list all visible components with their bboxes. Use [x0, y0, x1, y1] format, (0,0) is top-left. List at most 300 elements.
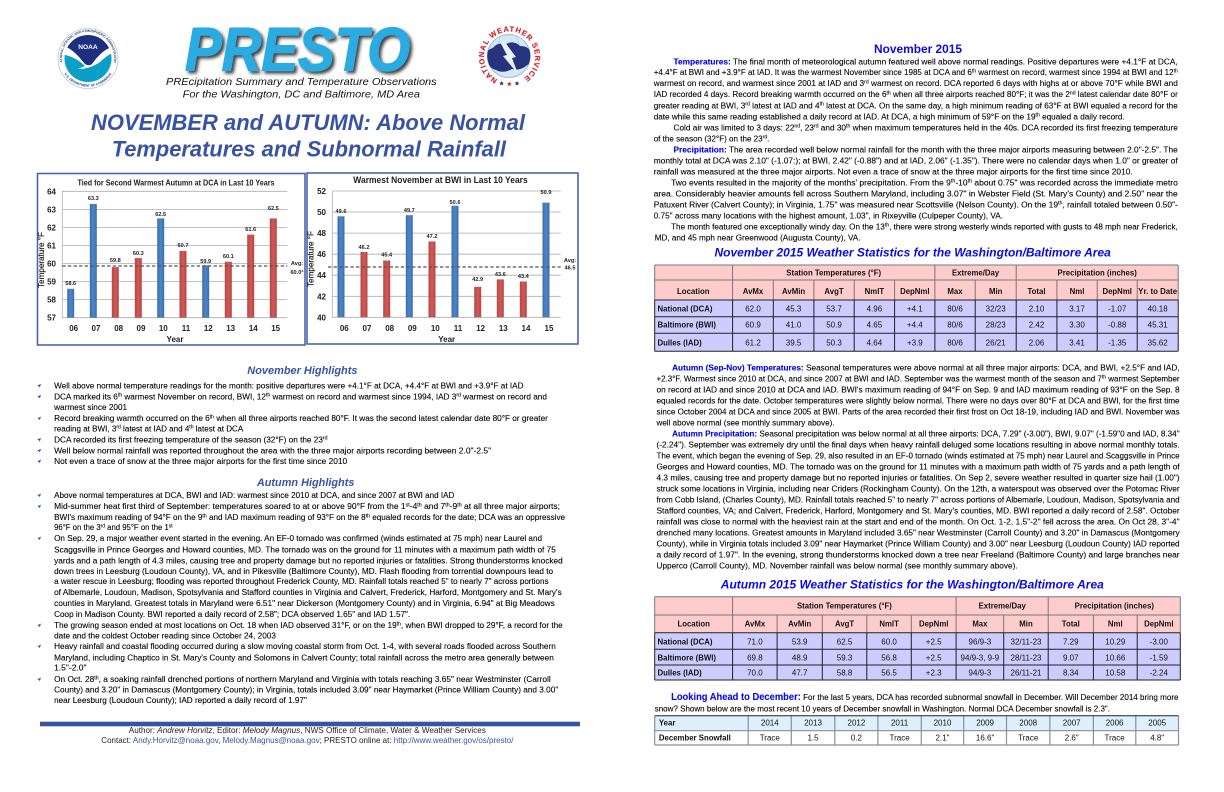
footer: credits: Author: Andrew Horvitz, Editor: Melody Magnus, NWS Office of Climate, Water & Weather Services	[129, 725, 486, 735]
table: November 2015 weather statistics: 2.42	[1029, 321, 1045, 330]
table: November 2015 weather statistics: 3.41	[1069, 338, 1085, 347]
text block: November 2015 narrative: th	[951, 179, 955, 185]
table: Autumn 2015 weather statistics: +2.5	[926, 638, 942, 647]
table: Autumn 2015 weather statistics: 56.8	[881, 653, 897, 662]
table: Autumn 2015 weather statistics: 58.8	[837, 669, 853, 678]
table: November 2015 weather statistics: DepNml	[900, 287, 930, 296]
table: Autumn 2015 weather statistics: 9.07	[1063, 653, 1079, 662]
table: Autumn 2015 weather statistics: Dulles (IAD)	[658, 669, 702, 678]
bar chart: DCA autumn temperature: 63	[47, 205, 57, 214]
table: November 2015 weather statistics: 62.0	[745, 305, 761, 314]
text block: Autumn highlights list: near Leesburg (Loudoun County); IAD reported a daily record of 1.97"	[54, 695, 307, 705]
text block: November 2015 narrative: warmest on record, and warmest since 2001 at IAD and 3	[654, 78, 873, 88]
bar chart: BWI November temperature: 43.6	[495, 272, 506, 278]
bar chart: BWI November temperature: 12	[476, 324, 486, 333]
bar chart: BWI November temperature: 46.2	[359, 245, 369, 251]
text block: Autumn highlights list: and 95°F on the 1	[105, 522, 169, 532]
text block: November 2015 narrative: warmest on record. DCA reported 6 days with highs at or above 70°F while BWI and	[869, 78, 1178, 88]
text block: Autumn highlights list: and 7	[422, 501, 445, 511]
text block: Autumn narrative: well above normal (see monthly summary above).	[656, 417, 834, 427]
table: Autumn 2015 weather statistics: 94/9-3	[969, 669, 992, 678]
bar chart: DCA autumn temperature: 62.5	[268, 206, 279, 212]
heading: November 2015: November 2015	[874, 42, 962, 56]
table: December snowfall history: 2006	[1106, 719, 1124, 728]
table: December snowfall history: 0.2	[851, 733, 863, 742]
table: December snowfall history: Year	[659, 719, 675, 728]
text block: November 2015 narrative: IAD recorded 4 days. Record breaking warmth occurred on the 6	[654, 89, 900, 99]
table: Autumn 2015 weather statistics: 53.9	[792, 638, 808, 647]
text block: November 2015 narrative: .	[767, 133, 769, 143]
text block: November 2015 narrative: The month featured one exceptionally windy day. On the 13	[671, 221, 897, 231]
bar chart: DCA autumn temperature: Temperature °F	[36, 232, 46, 288]
bar chart: DCA autumn temperature: Year	[167, 335, 183, 344]
text block: Autumn narrative: from Cobb Island, (Charles County), MD. Rainfall totals reached 5" to nearly 7" across portions of Albemarle, Loudoun, Madison, Spotsylvania and	[656, 494, 1180, 504]
bar chart: DCA autumn temperature: 62.5	[155, 212, 166, 218]
bar chart: BWI November temperature: 47.2	[427, 234, 437, 240]
table: November 2015 weather statistics: 2.10	[1029, 305, 1045, 314]
bar chart: BWI November temperature: 40	[317, 313, 327, 322]
table: Autumn 2015 weather statistics: DepNml	[1144, 620, 1174, 629]
table: November 2015 weather statistics: Dulles (IAD)	[658, 338, 702, 347]
text block: Autumn highlights list: of Albemarle, Loudoun, Madison, Spotsylvania and Stafford counties in Virginia and Calvert, Frederick, Harford, Montgomery and St. Mary's	[54, 587, 562, 597]
bar chart: DCA autumn temperature: 11	[182, 324, 191, 333]
text block: November 2015 narrative: latest calendar date 80°F or	[1076, 89, 1178, 99]
bar chart: DCA autumn temperature: 62	[47, 224, 57, 232]
text block: Autumn highlights list: -4	[410, 501, 417, 511]
table: November 2015 weather statistics: Station Temperatures (°F)	[786, 268, 882, 277]
bar chart: BWI November temperature: 15	[545, 324, 554, 333]
text block: Autumn highlights list: counties in Maryland. Greatest totals in Maryland were 6.51" near Dickerson (Montgomery County) and in Virginia, 6.94" at Big Meadows	[54, 598, 555, 608]
table: November 2015 weather statistics: 80/6	[947, 305, 963, 314]
text block: November highlights list: warmest on record and	[461, 391, 547, 401]
text block: November highlights list: rd	[456, 393, 461, 399]
bar chart: BWI November temperature: 50	[317, 208, 327, 217]
subtitle: For the Washington, DC and Baltimore, MD Area	[183, 89, 420, 101]
text block: November 2015 narrative: date while this same reading established a daily record at IAD. At DCA, a high minimum of 59°F on the 19	[654, 111, 1056, 121]
table: November 2015 weather statistics: 80/6	[947, 338, 963, 347]
bar chart: DCA autumn temperature: 61	[47, 242, 57, 250]
text block: Autumn highlights list: th	[397, 621, 401, 627]
table: November 2015 weather statistics: 41.0	[786, 321, 802, 330]
bar chart: BWI November temperature: 49.7	[404, 208, 415, 214]
bar chart: BWI November temperature: 45.4	[381, 252, 393, 258]
table: November 2015 weather statistics: 3.17	[1069, 305, 1085, 314]
text block: Autumn narrative: struck some locations in Virginia, including near Criders (Rockingham County). On the 12th, a waterspout was observed over the Potomac River	[656, 483, 1180, 493]
bar chart: DCA autumn temperature: 64	[47, 187, 57, 196]
table: December snowfall history: 16.6"	[976, 733, 994, 742]
text block: Autumn narrative: Autumn (Sep-Nov) Temperatures: Seasonal temperatures were above normal at all three major airports: DCA, and BWI, +2.5°F and IAD,	[672, 362, 1180, 372]
table: December snowfall history: 2012	[848, 719, 866, 728]
table: Autumn 2015 weather statistics: 59.3	[837, 653, 853, 662]
text block: November 2015 narrative: equaled a daily record.	[1040, 111, 1125, 121]
table: Autumn 2015 weather statistics: 10.29	[1105, 638, 1126, 647]
text block: Autumn narrative: Georges and Howard counties, MD. The tornado was on the ground for 11 minutes with a maximum path width of 75 yards and a path length of	[656, 461, 1180, 471]
text block: Autumn highlights list: th	[366, 513, 370, 519]
table: December snowfall history: Trace	[1105, 733, 1125, 742]
table: November 2015 weather statistics: 32/23	[986, 305, 1006, 314]
text block: November 2015 narrative: when all three airports reached 80°F; it was the 2	[891, 89, 1070, 99]
table: December snowfall history: 2.6"	[1065, 733, 1079, 742]
icon: NOAA logo: U.S. DEPARTMENT OF COMMERCE	[64, 72, 112, 87]
table: December snowfall history: Trace	[1018, 733, 1039, 742]
table: November 2015 weather statistics: -0.88	[1108, 321, 1127, 330]
text block: November 2015 narrative: +4.4°F at BWI and +3.9°F at IAD. It was the warmest November since 1985 at DCA and 6	[654, 67, 994, 77]
text block: Autumn narrative: +2.3°F. Warmest since 2010 at DCA, and since 2007 at BWI and IAD. September was the warmest month of the season and 7	[656, 373, 1137, 383]
text block: November 2015 narrative: rd	[745, 102, 750, 108]
text block: November 2015 narrative: monthly total at DCA was 2.10" (-1.07:); at BWI, 2.42" (-0.88") and at IAD, 2.06" (-1.35"). There were no calendar days when 1.0" or greater of	[654, 155, 1178, 165]
text block: Autumn highlights list: Maryland, including Chaptico in St. Mary's County and Solomons in Calvert County; total rainfall across the metro area generally between	[54, 652, 554, 662]
bar chart: BWI November temperature: Warmest November at BWI in Last 10 Years	[353, 175, 528, 185]
bar chart: DCA autumn temperature: 60.7	[178, 243, 188, 249]
table: November 2015 weather statistics: 45.3	[786, 305, 802, 314]
text block: November 2015 narrative: Temperatures: The final month of meteorological autumn featured well above normal readings. Positive departures were +4.1°F at DCA,	[674, 56, 1178, 66]
text block: November highlights list: th	[266, 393, 270, 399]
text block: Autumn highlights list: th	[445, 502, 450, 508]
table: November 2015 weather statistics: Baltimore (BWI)	[658, 321, 716, 330]
table: November 2015 weather statistics: 50.9	[826, 321, 842, 330]
bar chart: DCA autumn temperature: 58.6	[65, 281, 76, 287]
bar chart: BWI November temperature: 42	[317, 292, 327, 301]
text block: Autumn highlights list: th	[94, 675, 99, 681]
table: Autumn 2015 weather statistics	[655, 597, 1180, 680]
table: November 2015 weather statistics: +4.1	[907, 305, 923, 314]
text block: November highlights list: latest at IAD and 4	[121, 423, 190, 433]
bar chart: DCA autumn temperature: 13	[226, 324, 236, 333]
text block: Autumn highlights list: Heavy rainfall and coastal flooding occurred during a slow moving coastal storm from Oct. 1-4, with several roads flooded across Southern	[54, 641, 556, 651]
bar chart: DCA autumn temperature: 60.1	[223, 254, 234, 260]
bar chart: DCA autumn temperature: 14	[249, 324, 258, 333]
bar chart: BWI November temperature: 09	[408, 324, 417, 333]
bar chart: BWI November temperature: 44	[317, 271, 327, 280]
table: November 2015 weather statistics: Precipitation (inches)	[1058, 268, 1137, 277]
text block: Looking Ahead to December: snow? Shown below are the most recent 10 years of December snowfall in Washington. Normal DCA December snowfall is 2.3".	[655, 704, 1110, 714]
text block: Autumn highlights list: BWI's maximum reading of 94°F on the 9	[54, 512, 211, 522]
text block: November 2015 narrative: , 23	[800, 122, 814, 132]
table: Autumn 2015 weather statistics: 62.5	[837, 638, 853, 647]
bar chart: DCA autumn temperature	[36, 174, 305, 345]
table: Autumn 2015 weather statistics: 71.0	[747, 638, 763, 647]
text block: November 2015 narrative: about 0.75" was recorded across the immediate metro	[972, 177, 1178, 187]
text block: November highlights list: th	[189, 425, 194, 431]
bar chart: DCA autumn temperature: 08	[114, 324, 124, 333]
text block: Autumn narrative: drenched many locations. Greatest amounts in Maryland included 3.65" near Westminster (Carroll County) and 3.20" in Damascus (Montgomery	[656, 527, 1180, 537]
table: Autumn 2015 weather statistics: 69.8	[747, 653, 763, 662]
text block: November 2015 narrative: warmest on record, warmest since 1994 at BWI and 12	[976, 67, 1174, 77]
text block: Autumn narrative: County), while in Virginia totals included 3.09" near Haymarket (Prince William County) and 3.00" near Leesburg (Loudoun County) IAD reported	[656, 538, 1180, 548]
bar chart: BWI November temperature: 11	[454, 324, 463, 333]
bar chart: DCA autumn temperature: 60.3	[133, 251, 144, 257]
text block: November 2015 narrative: rd	[763, 135, 767, 141]
table: December snowfall history: 2008	[1019, 719, 1038, 728]
text block: November highlights list: rd	[116, 425, 121, 431]
text block: Autumn highlights list: date and the coldest October reading since October 24, 2003	[54, 630, 276, 640]
table: November 2015 weather statistics: 4.65	[867, 321, 883, 330]
heading: Autumn statistics table title: Autumn 2015 Weather Statistics for the Washington/Baltimore Area	[720, 578, 1104, 592]
subtitle: PREcipitation Summary and Temperature Observations	[166, 76, 437, 88]
text block: November highlights list: Not even a trace of snow at the three major airports for the first time since 2010	[54, 456, 347, 466]
text block: Autumn narrative: since October 2004 at DCA and since 2005 at BWI. Parts of the area recorded their first frost on Oct 18-19, including IAD and BWI. November was	[656, 406, 1180, 416]
bar chart: BWI November temperature: 52	[317, 187, 327, 196]
text block: Autumn highlights list: at all three major airports;	[462, 501, 560, 511]
text block: Looking Ahead to December: Looking Ahead to December: For the last 5 years, DCA has recorded subnormal snowfall in December. Will December 2014 bring more	[671, 692, 1179, 703]
table: November 2015 weather statistics: 60.9	[745, 321, 761, 330]
bar chart: DCA autumn temperature: Tied for Second Warmest Autumn at DCA in Last 10 Years	[78, 178, 275, 188]
text block: November 2015 narrative: greater reading at BWI, 3	[654, 100, 750, 110]
table: Autumn 2015 weather statistics: +2.5	[926, 653, 942, 662]
table: Autumn 2015 weather statistics: 32/11-23	[1010, 638, 1042, 647]
bar chart: BWI November temperature: 06	[340, 324, 349, 333]
table: December snowfall history: 2007	[1063, 719, 1081, 728]
table: November 2015 weather statistics: AvMx	[743, 287, 764, 296]
table: December snowfall history: 1.5	[807, 733, 819, 742]
text block: November 2015 narrative: latest at IAD and 4	[750, 100, 820, 110]
table: November 2015 weather statistics: -1.35	[1108, 338, 1127, 347]
text block: November 2015 narrative: rd	[814, 124, 819, 130]
text block: November 2015 narrative: when maximum temperatures held in the 40s. DCA recorded its first freezing temperature	[850, 122, 1178, 132]
table: November 2015 weather statistics: -1.07	[1108, 305, 1127, 314]
table: Autumn 2015 weather statistics: 56.5	[881, 669, 897, 678]
bar chart: BWI November temperature: 07	[363, 324, 372, 333]
text block: Autumn narrative: 4.3 miles, causing tree and property damage but no reported injuries or fatalities. On Sep 2, severe weather resulted in quarter size hail (1.00")	[656, 472, 1180, 482]
text block: Autumn narrative: equaled records for the date. October temperatures were slightly below normal. There were no days over 80°F at DCA and BWI, for the first time	[656, 395, 1180, 405]
table: Autumn 2015 weather statistics: AvMin	[788, 620, 811, 629]
bar chart: DCA autumn temperature: 63.3	[88, 196, 99, 202]
icon: NOAA logo	[58, 28, 118, 89]
bar chart: DCA autumn temperature: 57	[47, 314, 57, 323]
text block: November 2015 narrative: MD, and 45 mph near Greenwood (Augusta County), VA.	[655, 232, 860, 242]
bar chart: BWI November temperature: 13	[499, 324, 508, 333]
icon: NOAA logo: NOAA	[78, 44, 98, 51]
table: December snowfall history: 2010	[934, 719, 952, 728]
bar chart: BWI November temperature: Temperature °F	[306, 231, 316, 287]
title: PRESTO wordmark: PRESTO	[185, 16, 410, 84]
table: November 2015 weather statistics: 45.31	[1148, 321, 1168, 330]
table: November 2015 weather statistics: 4.96	[867, 305, 883, 314]
table: Autumn 2015 weather statistics: Station Temperatures (°F)	[797, 602, 892, 611]
text block: Autumn narrative: th	[1102, 375, 1106, 381]
text block: Autumn highlights list: and IAD maximum reading of 93°F on the 8	[207, 512, 366, 522]
table: Autumn 2015 weather statistics: Nml	[1108, 620, 1123, 629]
text block: November highlights list: DCA recorded its first freezing temperature of the season (32°F) on the 23	[54, 434, 336, 444]
table: November 2015 weather statistics: Min	[989, 287, 1003, 296]
table: November 2015 weather statistics: 28/23	[986, 321, 1006, 330]
text block: November highlights list: th	[118, 393, 122, 399]
table: Autumn 2015 weather statistics: 10.58	[1105, 669, 1126, 678]
table: December snowfall history: 2014	[761, 719, 779, 728]
footer: credits: Contact: Andy.Horvitz@noaa.gov, Melody.Magnus@noaa.gov; PRESTO online at: http://www.weather.gov/os/presto/	[101, 735, 514, 745]
icon: National Weather Service logo: NATIONAL WEATHER SERVICE	[478, 26, 540, 84]
text block: November 2015 narrative: th	[1058, 201, 1062, 207]
bar chart: DCA autumn temperature: 59.9	[200, 259, 211, 265]
text block: Autumn highlights list: , when BWI dropped to 29°F, a record for the	[401, 620, 563, 630]
text block: November highlights list	[37, 380, 548, 466]
bar chart: BWI November temperature: Avg:	[564, 258, 576, 264]
bar chart: BWI November temperature: 10	[431, 324, 440, 333]
table: Autumn 2015 weather statistics: Max	[972, 620, 988, 629]
text block: Autumn highlights list: th	[417, 502, 422, 508]
table: November 2015 weather statistics: 2.06	[1029, 338, 1045, 347]
text block: Autumn highlights list: Scaggsville in Prince Georges and Howard counties, MD. The tornado was on the ground for 11 minutes with a maximum path width of 75	[54, 544, 556, 554]
bar chart: BWI November temperature: 50.9	[541, 190, 551, 196]
text block: Autumn highlights list: On Oct. 28	[54, 674, 96, 684]
text block: Autumn highlights list: th	[457, 502, 462, 508]
bar chart: BWI November temperature: Year	[438, 335, 455, 344]
bar chart: BWI November temperature: 46	[317, 250, 327, 259]
table: November 2015 weather statistics	[655, 265, 1178, 351]
bar chart: DCA autumn temperature: 12	[204, 324, 213, 333]
table: Autumn 2015 weather statistics: 96/9-3	[969, 638, 992, 647]
table: Autumn 2015 weather statistics: 7.29	[1063, 638, 1079, 647]
table: Autumn 2015 weather statistics: 47.7	[792, 669, 808, 678]
table: November 2015 weather statistics: 80/6	[947, 321, 963, 330]
bar chart: DCA autumn temperature: 61.6	[245, 227, 256, 233]
text block: Autumn highlights list: 96°F on the 3	[54, 522, 106, 532]
text block: Autumn narrative: Autumn Precipitation: Seasonal precipitation was below normal at all three airports: DCA, 7.29" (-3.00"), BWI, 9.07" (-1.59"0 and IAD, 8.34"	[672, 428, 1180, 438]
text block: November highlights list: latest at DCA	[194, 423, 243, 433]
text block: Autumn narrative: rainfall was close to normal with the heaviest rain at the start and end of the month. On Oct. 1-2, 1.5"-2" fell across the area. On Oct 28, 3"-4"	[656, 516, 1180, 526]
text block: November 2015 narrative: rainfall was measured at the three major airports. Not even a trace of snow at the three major airports for the first time since 2010.	[654, 166, 1133, 176]
table: November 2015 weather statistics: AvgT	[824, 287, 844, 296]
text block: November highlights list: warmest November on record, BWI, 12	[122, 391, 266, 401]
table: December snowfall history: 2005	[1148, 719, 1167, 728]
text block: November 2015 narrative: th	[887, 90, 891, 96]
table: Autumn 2015 weather statistics: NmlT	[879, 620, 899, 629]
text block: Autumn highlights list: On Sep. 29, a major weather event started in the evening. An EF-0 tornado was confirmed (winds estimated at 75 mph) near Laurel and	[54, 533, 542, 543]
text block: Autumn narrative: Stafford counties, VA; and Calvert, Frederick, Harford, Montgomery and St. Mary's counties, MD. BWI reported a daily record of 2.58". October	[656, 505, 1180, 515]
text block: November highlights list: Well above normal temperature readings for the month: positive departures were +4.1°F at DCA, +4.4°F at BWI and +3.9°F at IAD	[54, 380, 523, 390]
heading: main title	[91, 110, 526, 162]
text block: Autumn narrative: The event, which began the evening of Sep. 29, also resulted in an EF-0 tornado (winds estimated at 75 mph) near Laurel and Scaggsville in Prince	[656, 450, 1180, 460]
text block: November 2015 narrative: of the season (32°F) on the 23	[654, 133, 770, 143]
text block: Autumn highlights list: County) and 3.20" in Damascus (Montgomery County); in Virginia, totals included 3.09" near Haymarket (Prince William County) and 3.00"	[54, 684, 558, 694]
bar chart: BWI November temperature: 42.9	[472, 277, 483, 283]
text block: Autumn narrative: a daily record of 1.97". In the evening, strong thunderstorms knocked down a tree near Freeland (Baltimore County) and large branches near	[656, 549, 1180, 559]
text block: Autumn narrative: (-2.24"). September was extremely dry until the final days when heavy rainfall deluged some locations resulting in above normal monthly totals.	[656, 439, 1180, 449]
text block: November 2015 narrative: -10	[955, 177, 968, 187]
text block: November 2015 narrative: 0.75" across many locations with the highest amount, 1.03", in Rixeyville (Culpeper County), VA.	[654, 210, 1003, 220]
heading: main title: Temperatures and Subnormal Rainfall	[112, 137, 507, 162]
bar chart: BWI November temperature: 46.5	[565, 266, 575, 272]
text block: November highlights list: reading at BWI, 3	[54, 423, 121, 433]
bar chart: DCA autumn temperature: Avg:	[291, 261, 303, 267]
text block: November 2015 narrative: Patuxent River (Calvert County); in Virginia, 1.75" was measured near Scottsville (Nelson County). On the 19	[654, 199, 1068, 209]
text block: November 2015 narrative: th	[820, 102, 824, 108]
text block: November 2015 narrative: and 30	[819, 122, 846, 132]
text block: November 2015 narrative: th	[1174, 68, 1178, 74]
table: November 2015 weather statistics: 4.64	[867, 338, 883, 347]
text block: Autumn narrative	[656, 362, 1180, 570]
table: December snowfall history: 2009	[976, 719, 995, 728]
text block: November 2015 narrative: th	[885, 223, 889, 229]
table: Autumn 2015 weather statistics: National (DCA)	[658, 638, 713, 647]
text block: Autumn narrative: warmest September	[1106, 373, 1180, 383]
text block: November highlights list: warmest since 2001	[53, 402, 127, 412]
text block: Autumn highlights list: st	[169, 523, 173, 529]
table: November 2015 weather statistics: Max	[947, 287, 963, 296]
bar chart: DCA autumn temperature: 09	[137, 324, 146, 333]
text block: November 2015 narrative: Precipitation: The area recorded well below normal rainfall for the month with the three major airports measuring between 2.0"-2.5". The	[674, 144, 1178, 154]
table: Autumn 2015 weather statistics: -2.24	[1150, 669, 1168, 678]
table: November 2015 weather statistics: 50.3	[826, 338, 842, 347]
text block: November 2015 narrative: Two events resulted in the majority of the months' precipitation. From the 9	[671, 177, 955, 187]
table: December snowfall history: 2013	[804, 719, 822, 728]
bar chart: BWI November temperature: 43.4	[518, 274, 530, 280]
text block: November highlights list: warmest on record and warmest since 1994, IAD 3	[270, 391, 457, 401]
text block: Autumn highlights list: The growing season ended at most locations on Oct. 18 when IAD observed 31°F, or on the 19	[54, 620, 414, 630]
table: November 2015 weather statistics: 39.5	[786, 338, 802, 347]
text block: November 2015 narrative: , there were strong westerly winds reported with gusts to 48 mph near Frederick,	[889, 221, 1178, 231]
text block: Autumn highlights list: yards and a path length of 4.3 miles, causing tree and property damage but no reported injuries or fatalities. Strong thunderstorms knocked	[54, 555, 563, 565]
subtitle	[166, 76, 437, 101]
text block: Autumn narrative: on record at IAD and since 2010 at DCA and IAD. BWI's maximum reading of 94°F on Sep. 9 and IAD maximum reading of 93°F on the Sep. 8	[656, 384, 1180, 394]
bar chart: DCA autumn temperature: 59	[47, 278, 57, 287]
table: November 2015 weather statistics: Location	[677, 287, 710, 296]
text block: Autumn highlights list: a water rescue in Leesburg; flooding was reported throughout Frederick County, MD. Rainfall totals reached 5" to nearly 7" across portions	[54, 576, 549, 586]
table: Autumn 2015 weather statistics: 26/11-21	[1010, 669, 1042, 678]
table: December snowfall history: 2.1"	[936, 733, 950, 742]
text block: Autumn highlights list	[37, 490, 565, 705]
text block: November 2015 narrative: Cold air was limited to 3 days: 22	[674, 122, 800, 132]
text block: November 2015 narrative: rd	[864, 79, 869, 85]
text block: November highlights list: Record breaking warmth occurred on the 6	[54, 413, 217, 423]
table: Autumn 2015 weather statistics: Extreme/Day	[979, 602, 1026, 611]
table: November 2015 weather statistics: 26/21	[986, 338, 1006, 347]
text block: Autumn narrative: Upperco (Carroll County), MD. November rainfall was below normal (see monthly summary above).	[656, 560, 1018, 570]
table: Autumn 2015 weather statistics: Min	[1019, 620, 1033, 629]
table: Autumn 2015 weather statistics: 8.34	[1063, 669, 1079, 678]
table: November 2015 weather statistics: AvMin	[782, 287, 805, 296]
text block: November highlights list: th	[210, 414, 214, 420]
text block: November highlights list: Well below normal rainfall was reported throughout the area with the three major airports recording between 2.0"-2.5"	[54, 445, 491, 455]
table: December snowfall history	[655, 716, 1178, 745]
text block: November 2015 narrative: latest at DCA. On the same day, a high minimum reading of 63°F at BWI equaled a record for the	[824, 100, 1178, 110]
bar chart: DCA autumn temperature: 10	[159, 324, 168, 333]
bar chart: BWI November temperature: 49.6	[336, 209, 346, 215]
text block: Autumn highlights list: 1.5"-2.0"	[54, 663, 86, 673]
text block: Autumn highlights list: equaled records for the date; DCA was an oppressive	[370, 512, 565, 522]
table: Autumn 2015 weather statistics: Location	[677, 620, 710, 629]
table: November 2015 weather statistics: Total	[1027, 287, 1046, 296]
text block: November 2015 narrative: area. Considerably heavier amounts fell across Southern Maryland, including 3.07" in Webster Field (St. Mary's County) and 2.50" near the	[654, 188, 1178, 198]
table: November 2015 weather statistics: DepNml	[1102, 287, 1132, 296]
text block: Autumn highlights list: Above normal temperatures at DCA, BWI and IAD: warmest since 2010 at DCA, and since 2007 at BWI and IAD	[54, 490, 454, 500]
table: November 2015 weather statistics: +4.4	[907, 321, 923, 330]
text block: November 2015 narrative: th	[972, 68, 976, 74]
text block: November highlights list: when all three airports reached 80°F. It was the second latest calendar date 80°F or greater	[214, 413, 548, 423]
text block: November 2015 narrative: th	[1036, 113, 1040, 119]
table: November 2015 weather statistics: National (DCA)	[658, 305, 713, 314]
text block: Autumn highlights list: -9	[450, 501, 457, 511]
bar chart: BWI November temperature	[306, 173, 578, 344]
table: November 2015 weather statistics: 61.2	[745, 338, 761, 347]
table: November 2015 weather statistics: 35.62	[1148, 338, 1168, 347]
text block: Autumn highlights list: rd	[101, 523, 105, 529]
table: Autumn 2015 weather statistics: 10.66	[1105, 653, 1126, 662]
bar chart: BWI November temperature: 48	[317, 229, 327, 238]
table: Autumn 2015 weather statistics: Baltimore (BWI)	[658, 653, 716, 662]
bar chart: BWI November temperature: 08	[385, 324, 395, 333]
text block: November 2015 narrative: nd	[794, 124, 800, 130]
table: Autumn 2015 weather statistics: DepNml	[919, 620, 948, 629]
table: Autumn 2015 weather statistics: Total	[1062, 620, 1080, 629]
table: Autumn 2015 weather statistics: AvMx	[745, 620, 766, 629]
text block: November highlights list: DCA marked its 6	[54, 391, 121, 401]
table: December snowfall history: December Snowfall	[659, 733, 731, 742]
table: Autumn 2015 weather statistics: +2.3	[926, 669, 942, 678]
table: November 2015 weather statistics: Extreme/Day	[952, 268, 1000, 277]
table: November 2015 weather statistics: NmlT	[865, 287, 884, 296]
table: December snowfall history: 2011	[891, 719, 909, 728]
